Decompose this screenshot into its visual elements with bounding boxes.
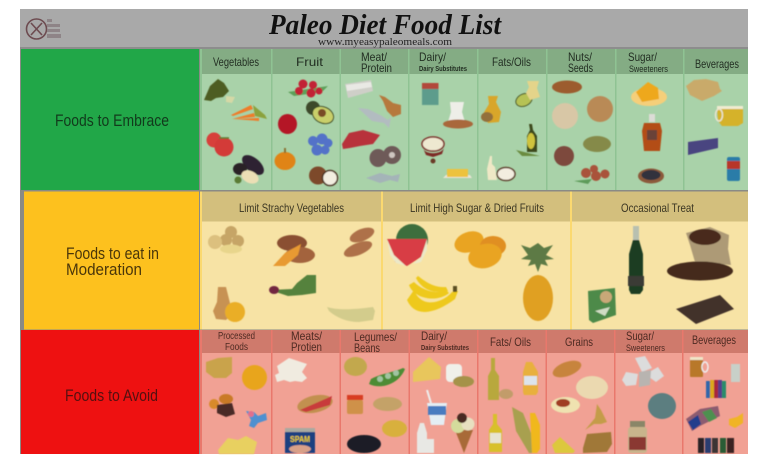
- icon: bananas: [407, 276, 458, 312]
- icon: chocolate bar: [688, 138, 718, 155]
- icon: stevia cubes: [686, 79, 722, 101]
- row label: Foods to Embrace: [21, 49, 199, 190]
- panel: avoid foods: [200, 329, 748, 454]
- icon: tomatoes: [206, 132, 234, 156]
- embrace headers: Seeds: [568, 61, 593, 75]
- icon: watermelon: [387, 224, 428, 266]
- row label: Foods to Embrace: Foods to Embrace: [55, 111, 169, 130]
- icon: corn and corn oil: [512, 407, 540, 453]
- icon: coffee sack: [667, 227, 733, 280]
- row label: Foods to eat in Moderation: [24, 192, 199, 330]
- row label: Foods to eat in Moderation: Foods to eat in: [66, 244, 159, 263]
- icon: pasta: [551, 397, 580, 413]
- icon: vegetable oil jug: [523, 362, 538, 395]
- row label: Foods to Avoid: [21, 330, 199, 454]
- icon: coconut: [309, 166, 338, 186]
- icon: apple: [278, 114, 297, 134]
- icon: pastries: [209, 394, 235, 417]
- icon: small can: [731, 364, 740, 382]
- icon: blueberries: [308, 134, 332, 156]
- row label: Foods to Avoid: Foods to Avoid: [65, 386, 158, 405]
- icon: juice: [729, 413, 743, 428]
- icon: tea mug: [716, 106, 743, 126]
- icon: candy: [246, 411, 267, 428]
- icon: soda can: [727, 157, 740, 181]
- icon: grains: [453, 376, 474, 387]
- avoid headers: Beans: [354, 341, 380, 355]
- embrace headers: Beverages: [695, 57, 739, 71]
- avoid headers: Grains: [565, 335, 593, 349]
- icon: peanut butter: [347, 395, 363, 414]
- icon: canola oil: [488, 358, 513, 400]
- embrace headers: Sugar/: [628, 50, 658, 64]
- icon: honeycomb: [631, 82, 667, 106]
- icon: milk jug with nuts: [443, 102, 473, 128]
- icon: milk bottles: [417, 423, 434, 453]
- icon: fries: [242, 365, 267, 390]
- title: Paleo Diet Food List: [268, 9, 502, 41]
- icon: hazelnuts: [574, 165, 610, 184]
- icon: lentils: [382, 420, 407, 437]
- avoid headers: Fats/ Oils: [490, 335, 531, 349]
- icon: sugar cubes: [622, 356, 664, 387]
- icon: salmon: [358, 108, 391, 128]
- icon: oysters: [370, 146, 401, 167]
- row label: Foods to eat in Moderation: Moderation: [66, 260, 142, 279]
- icon: crackers: [206, 357, 232, 378]
- panel: moderation foods: [200, 192, 748, 330]
- icon: walnuts: [587, 96, 613, 122]
- avoid headers: Dairy Substitutes: [421, 345, 469, 352]
- icon: cashews: [552, 103, 578, 129]
- icon: pecans: [554, 146, 574, 166]
- icon: sweet potatoes cut: [273, 235, 315, 266]
- icon: butternut squash: [213, 287, 245, 322]
- icon: steak: [342, 130, 380, 149]
- icon: potato chips: [218, 436, 257, 454]
- icon: carrots: [231, 105, 267, 121]
- embrace headers: Meat/: [361, 50, 388, 64]
- avoid headers: Protien: [291, 340, 322, 354]
- icon: olive oil bottle: [516, 124, 540, 156]
- icon: potatoes: [208, 226, 244, 254]
- icon: avocado oil: [514, 81, 540, 109]
- icon: soda packs: [686, 406, 720, 431]
- icon: yogurt: [427, 390, 447, 425]
- icon: wheat: [585, 404, 607, 430]
- icon: agave: [648, 393, 676, 419]
- icon: hot dog: [296, 392, 334, 416]
- icon: yams: [342, 225, 376, 260]
- icon: spam can: [285, 428, 315, 453]
- icon: corn: [552, 437, 575, 453]
- icon: cranberries: [288, 80, 328, 98]
- icon: bowl: [422, 137, 444, 164]
- embrace headers: Sweeteners: [629, 64, 668, 74]
- moderation headers: Occasional Treat: [621, 201, 695, 215]
- avoid headers: [218, 329, 736, 355]
- icon: pumpkin seeds: [583, 136, 611, 152]
- icon: chicken: [379, 95, 401, 117]
- icon: eggplant and daikon: [233, 151, 267, 186]
- icon: butter: [443, 169, 472, 178]
- moderation headers: Limit Strachy Vegetables: [239, 201, 344, 215]
- icon: date syrup dish: [638, 168, 664, 184]
- icon: beetroot with greens: [269, 275, 316, 296]
- avoid headers: Legumes/: [354, 330, 398, 344]
- embrace headers: Fruit: [296, 55, 324, 69]
- embrace headers: Nuts/: [568, 50, 593, 64]
- embrace headers: [213, 50, 739, 75]
- icon: oil bottle: [489, 414, 502, 452]
- icon: almonds: [552, 80, 582, 94]
- avoid headers: Sugar/: [626, 329, 655, 343]
- icon: milk carton: [422, 83, 438, 105]
- moderation headers: Limit High Sugar & Dried Fruits: [410, 201, 544, 215]
- icon: champagne: [628, 226, 644, 294]
- website url: www.myeasypaleomeals.com: [318, 37, 452, 48]
- embrace headers: Fats/Oils: [492, 55, 531, 69]
- icon: chocolate: [676, 295, 734, 324]
- icon: tofu: [275, 358, 307, 382]
- embrace headers: Protein: [361, 61, 392, 75]
- icon: rice: [576, 376, 608, 399]
- icon: pumpkin: [274, 148, 296, 170]
- icon: milk glass: [446, 364, 462, 382]
- icon: sports drinks: [706, 380, 726, 398]
- avoid headers: Beverages: [692, 333, 736, 347]
- logo: [26, 19, 61, 39]
- embrace headers: Vegetables: [213, 55, 259, 69]
- icon: pineapple: [521, 243, 554, 321]
- icon: kale: [204, 79, 235, 103]
- icon: peanuts: [373, 397, 402, 411]
- icon: syrup jar: [628, 421, 647, 453]
- icon: cheese: [413, 357, 441, 382]
- avoid headers: Dairy/: [421, 329, 448, 343]
- header bar: [20, 9, 748, 49]
- icon: energy drink cans: [698, 438, 734, 453]
- icon: zucchini: [327, 307, 375, 322]
- avoid headers: Meats/: [291, 329, 323, 343]
- icon: oil jug: [481, 96, 501, 123]
- icon: ice cream: [451, 413, 474, 453]
- avoid headers: Sweeteners: [626, 343, 665, 353]
- icon: mangoes: [451, 227, 506, 272]
- icon: maple syrup: [642, 114, 662, 151]
- moderation headers: [239, 201, 695, 215]
- icon: avocado: [304, 99, 336, 127]
- avoid headers: Foods: [225, 342, 248, 353]
- panel: embrace foods: [200, 49, 748, 190]
- icon: black beans: [347, 435, 381, 453]
- embrace headers: Dairy Substitutes: [419, 66, 467, 73]
- icon: bread: [551, 357, 583, 381]
- icon: peas: [369, 368, 405, 386]
- icon: coconut oil: [487, 156, 515, 180]
- icon: spam can: SPAM: [290, 435, 310, 444]
- icon: loaf: [583, 432, 612, 453]
- avoid headers: Processed: [218, 331, 255, 342]
- icon: stevia box: [588, 288, 616, 323]
- icon: eggs carton: [345, 80, 373, 98]
- icon: soybeans: [344, 357, 367, 376]
- icon: beer mug: [690, 357, 708, 377]
- embrace headers: Dairy/: [419, 50, 447, 64]
- icon: tuna: [366, 173, 400, 183]
